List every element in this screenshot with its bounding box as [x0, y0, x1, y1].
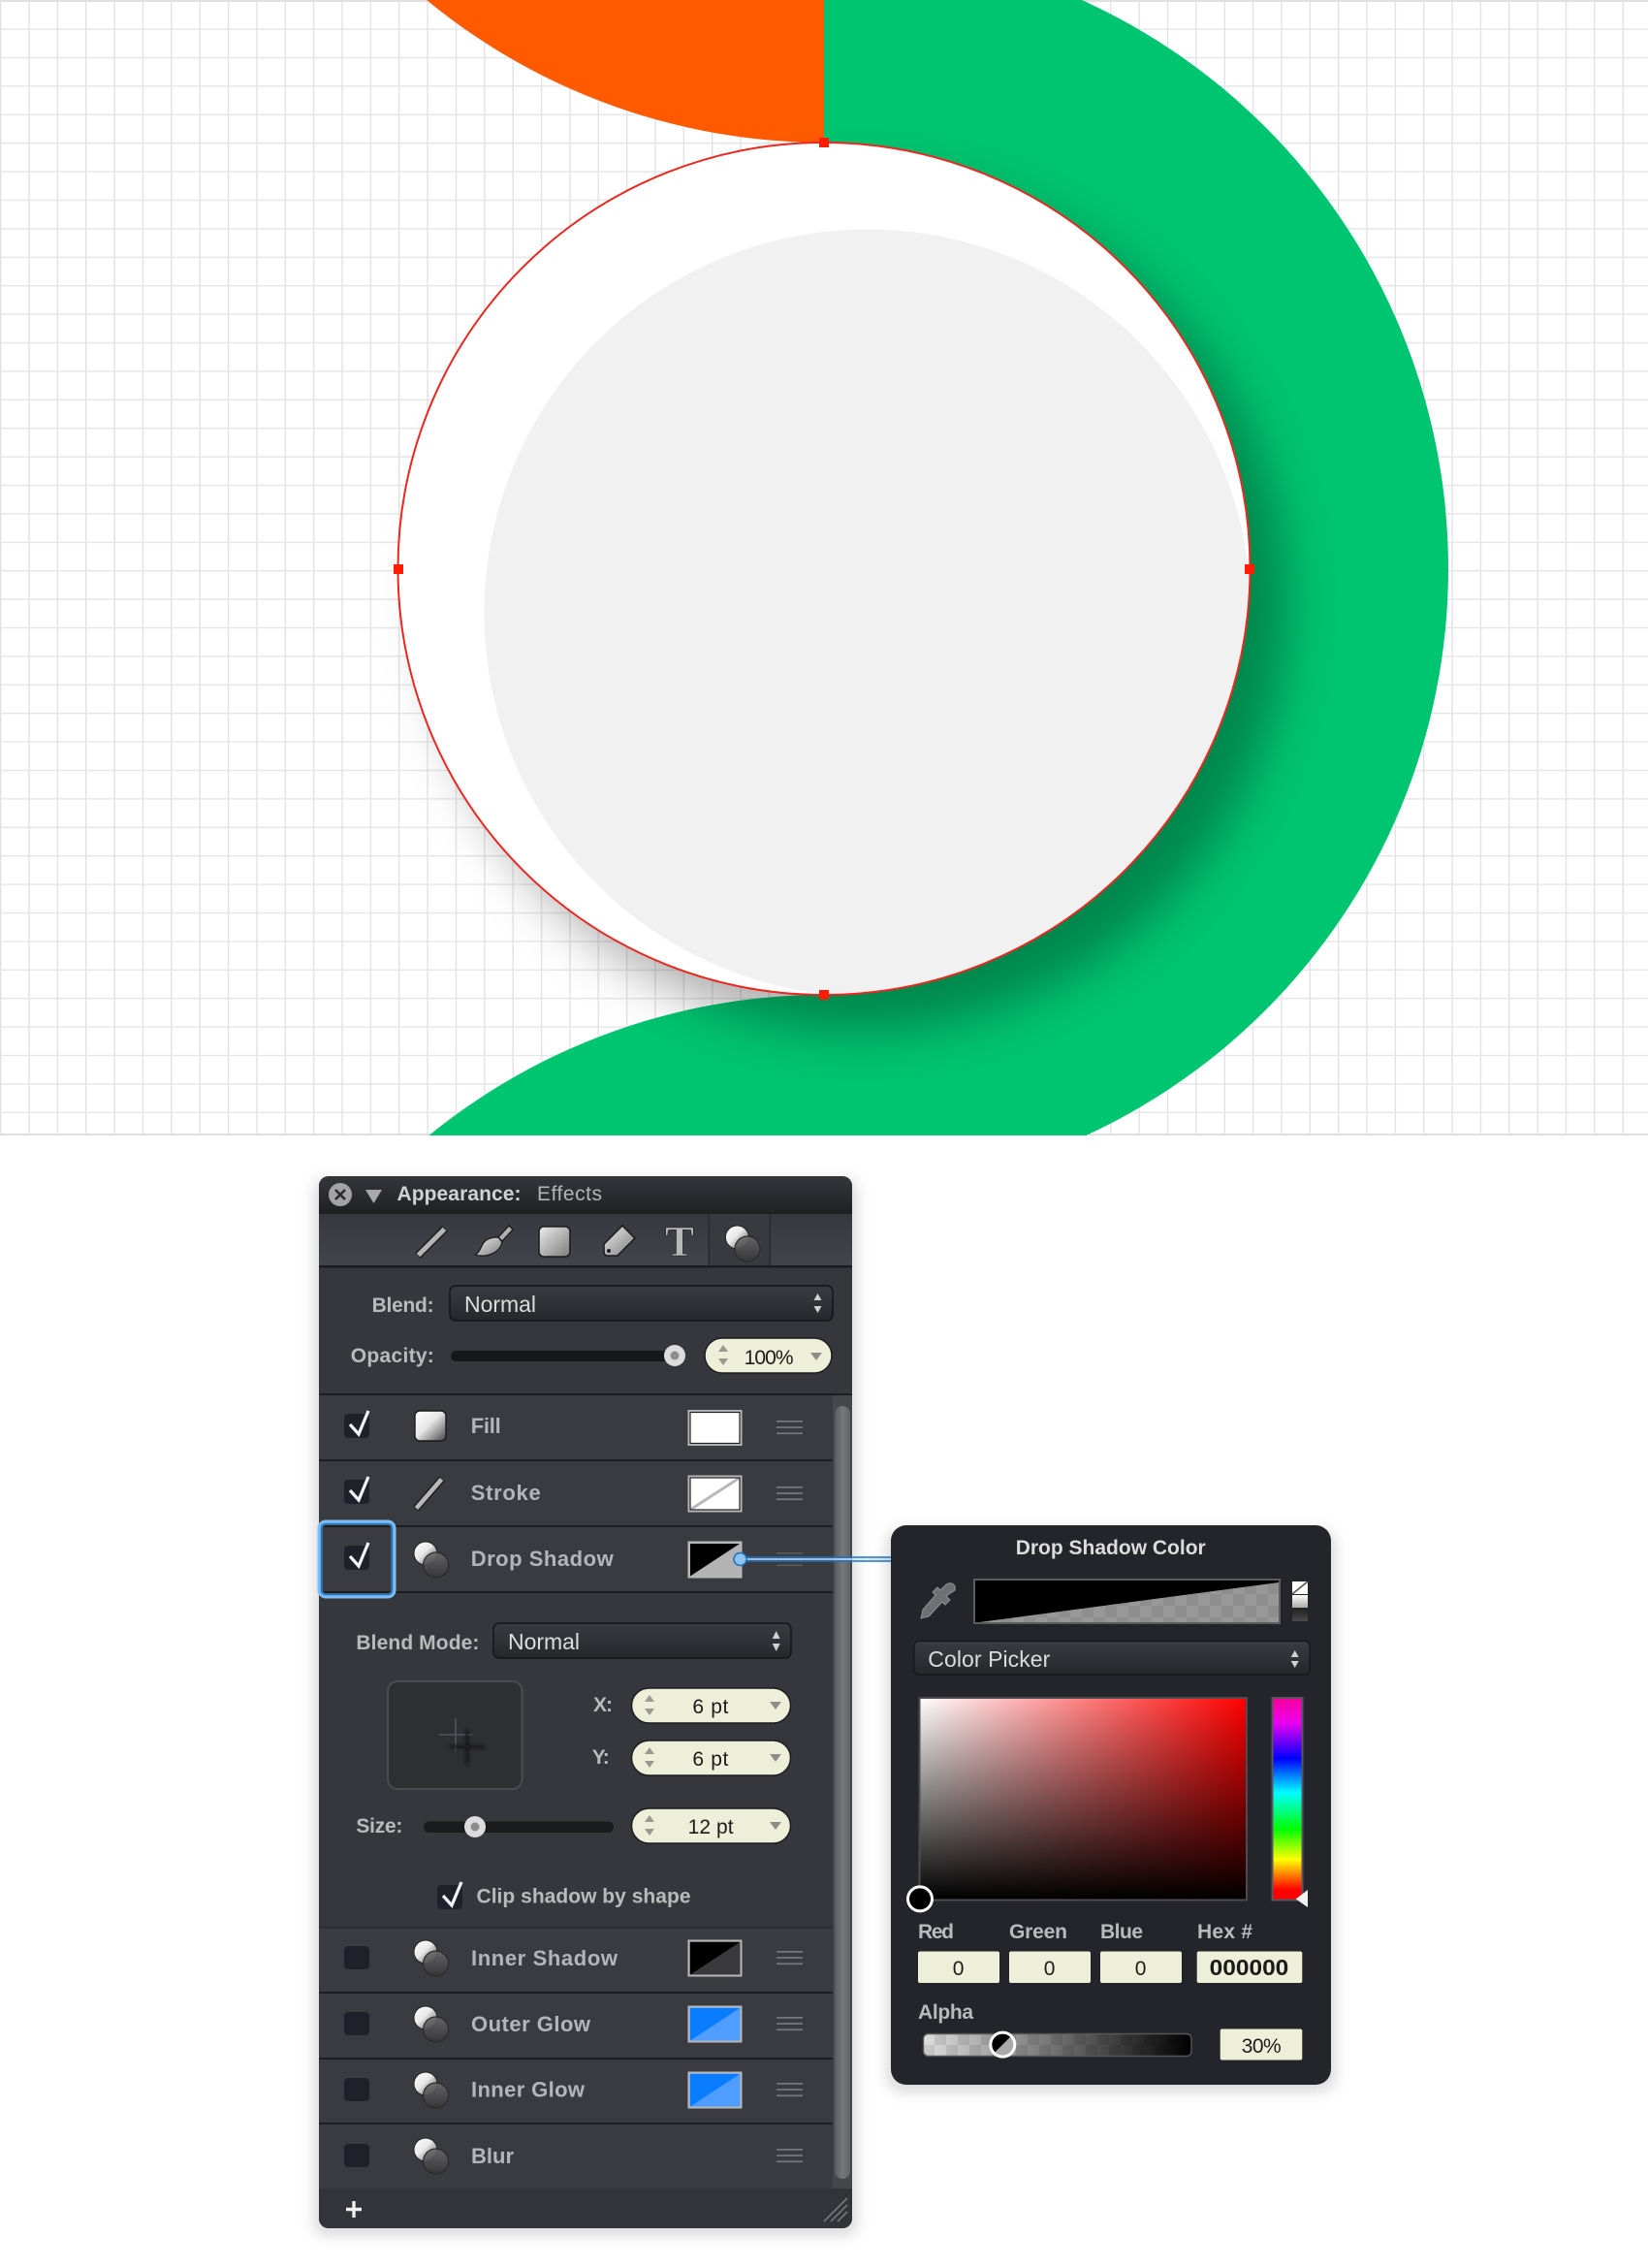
- red input: [918, 1921, 999, 1983]
- blend dropdown: [372, 1286, 833, 1321]
- row: outer glow: [344, 2006, 803, 2042]
- x offset stepper: [593, 1688, 791, 1723]
- alpha slider and input: [918, 2001, 1302, 2060]
- size slider and stepper: [356, 1808, 791, 1843]
- rows shading: [319, 1395, 833, 2188]
- hex input: Hex #: [1197, 1921, 1252, 1943]
- highlight around drop shadow checkbox: [320, 1522, 394, 1596]
- orange crescent shape: [427, 0, 824, 142]
- artboard: grid background: [0, 0, 1648, 1135]
- row: blur: Blur: [471, 2144, 514, 2168]
- title bar: Appearance:: [397, 1183, 522, 1205]
- opacity slider and stepper: Opacity:: [351, 1345, 434, 1367]
- row: inner glow: Inner Glow: [471, 2077, 586, 2102]
- blend mode dropdown: [356, 1623, 791, 1658]
- green input: [1009, 1921, 1091, 1983]
- size slider and stepper: 12 pt: [688, 1816, 734, 1838]
- row: stroke: Stroke: [471, 1481, 541, 1505]
- blend mode dropdown: Blend Mode:: [356, 1632, 479, 1654]
- row: inner shadow: Inner Shadow: [471, 1946, 618, 1970]
- inner grey circle: [485, 229, 1251, 997]
- color preview swatch: [974, 1580, 1308, 1623]
- icon: eyedropper: [921, 1583, 955, 1618]
- clip shadow by shape checkbox: [437, 1882, 690, 1909]
- blend dropdown: Blend:: [372, 1294, 434, 1317]
- size slider and stepper: Size:: [356, 1815, 402, 1837]
- row: inner shadow: [344, 1940, 803, 1976]
- blend mode dropdown: Normal: [508, 1629, 580, 1654]
- y offset stepper: 6 pt: [692, 1748, 729, 1771]
- blend dropdown: Normal: [464, 1292, 536, 1317]
- toolbar with tool icons: T: [665, 1218, 694, 1265]
- x offset stepper: 6 pt: [692, 1696, 729, 1718]
- alpha slider and input: 30%: [1242, 2035, 1282, 2058]
- x offset stepper: X:: [593, 1694, 613, 1716]
- row: drop shadow: [344, 1542, 803, 1578]
- row: drop shadow: Drop Shadow: [471, 1547, 615, 1571]
- scrollbar: [833, 1394, 852, 2188]
- row: stroke: [344, 1476, 803, 1511]
- connector line from swatch to popup: [734, 1553, 893, 1565]
- saturation and brightness field: [907, 1698, 1247, 1911]
- toolbar with tool icons: [319, 1214, 852, 1268]
- red input: Red: [918, 1921, 954, 1943]
- hue slider: [1272, 1698, 1308, 1907]
- green input: 0: [1044, 1958, 1055, 1980]
- white circle with highlight and red selection outline: [394, 138, 1254, 1000]
- row: fill: Fill: [471, 1414, 501, 1438]
- footer with add button and resize grip: [319, 2188, 852, 2228]
- green input: Green: [1009, 1921, 1067, 1943]
- color picker dropdown: [914, 1641, 1310, 1675]
- row: outer glow: Outer Glow: [471, 2012, 591, 2036]
- blue input: [1100, 1921, 1182, 1983]
- title bar: Effects: [537, 1183, 602, 1205]
- popup title: Drop Shadow Color: [1016, 1537, 1206, 1559]
- blue input: 0: [1135, 1958, 1146, 1980]
- row dividers: [319, 1393, 852, 2124]
- title bar: [319, 1176, 852, 1214]
- opacity slider and stepper: 100%: [745, 1347, 794, 1369]
- hex input: 000000: [1210, 1955, 1288, 1980]
- hex input: [1197, 1921, 1302, 1983]
- opacity slider and stepper: [351, 1338, 832, 1373]
- red input: 0: [953, 1958, 964, 1980]
- green S-curve shape: [397, 0, 1448, 1135]
- alpha slider and input: Alpha: [918, 2001, 973, 2024]
- shadow offset preview: [388, 1681, 522, 1789]
- clip shadow by shape checkbox: Clip shadow by shape: [477, 1885, 690, 1908]
- y offset stepper: Y:: [592, 1746, 610, 1769]
- row: inner glow: [344, 2072, 803, 2108]
- color picker dropdown: Color Picker: [928, 1646, 1051, 1672]
- y offset stepper: [592, 1741, 791, 1775]
- panel: drop shadow color popup: [886, 1525, 1336, 2092]
- blue input: Blue: [1100, 1921, 1143, 1943]
- row: blur: [344, 2138, 803, 2174]
- panel: appearance effects: [314, 1176, 857, 2236]
- circle drop shadow: [435, 179, 1286, 1031]
- row: fill: [344, 1411, 803, 1445]
